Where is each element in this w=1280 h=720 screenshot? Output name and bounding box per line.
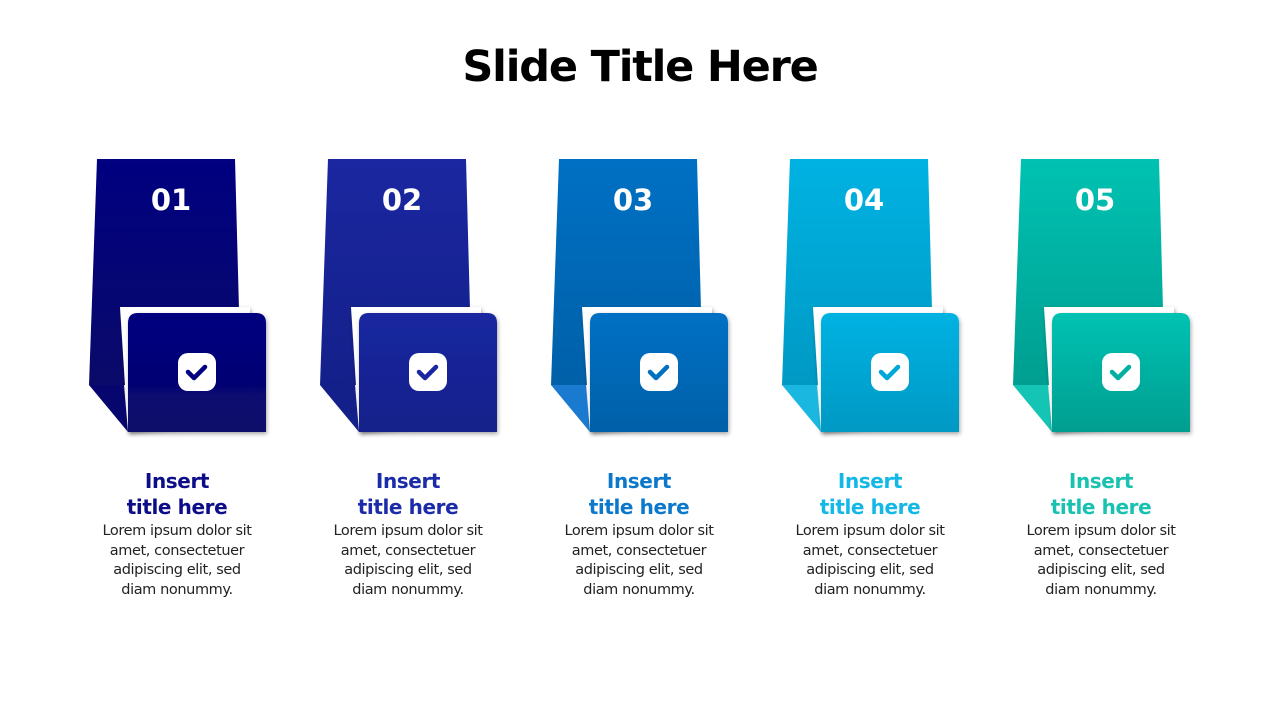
text 02: Insert bbox=[376, 469, 440, 493]
item 03: 03 bbox=[613, 183, 653, 217]
text 02: Lorem ipsum dolor sit amet, consectetuer adipiscing elit, sed diam nonummy. bbox=[333, 523, 483, 598]
item 02 bbox=[320, 159, 497, 432]
item 04 bbox=[782, 159, 959, 432]
item 05: 05 bbox=[1075, 183, 1115, 217]
text 01: title here bbox=[127, 495, 227, 519]
text 03: title here bbox=[589, 495, 689, 519]
text 02 bbox=[333, 469, 483, 598]
text 04: Lorem ipsum dolor sit amet, consectetuer adipiscing elit, sed diam nonummy. bbox=[795, 523, 945, 598]
text 03 bbox=[564, 469, 714, 598]
text 05: title here bbox=[1051, 495, 1151, 519]
text 05 bbox=[1026, 469, 1176, 598]
text 04: title here bbox=[820, 495, 920, 519]
text 05: Insert bbox=[1069, 469, 1133, 493]
item 05 bbox=[1013, 159, 1190, 432]
item 01: 01 bbox=[151, 183, 191, 217]
text 05: Lorem ipsum dolor sit amet, consectetuer adipiscing elit, sed diam nonummy. bbox=[1026, 523, 1176, 598]
title: Slide Title Here bbox=[462, 42, 818, 92]
text 03: Insert bbox=[607, 469, 671, 493]
text 01: Lorem ipsum dolor sit amet, consectetuer adipiscing elit, sed diam nonummy. bbox=[102, 523, 252, 598]
item 04: 04 bbox=[844, 183, 884, 217]
text 04: Insert bbox=[838, 469, 902, 493]
text 04 bbox=[795, 469, 945, 598]
text 01: Insert bbox=[145, 469, 209, 493]
item 03 bbox=[551, 159, 728, 432]
text 03: Lorem ipsum dolor sit amet, consectetuer adipiscing elit, sed diam nonummy. bbox=[564, 523, 714, 598]
text 01 bbox=[102, 469, 252, 598]
text 02: title here bbox=[358, 495, 458, 519]
item 01 bbox=[89, 159, 266, 432]
item 02: 02 bbox=[382, 183, 422, 217]
